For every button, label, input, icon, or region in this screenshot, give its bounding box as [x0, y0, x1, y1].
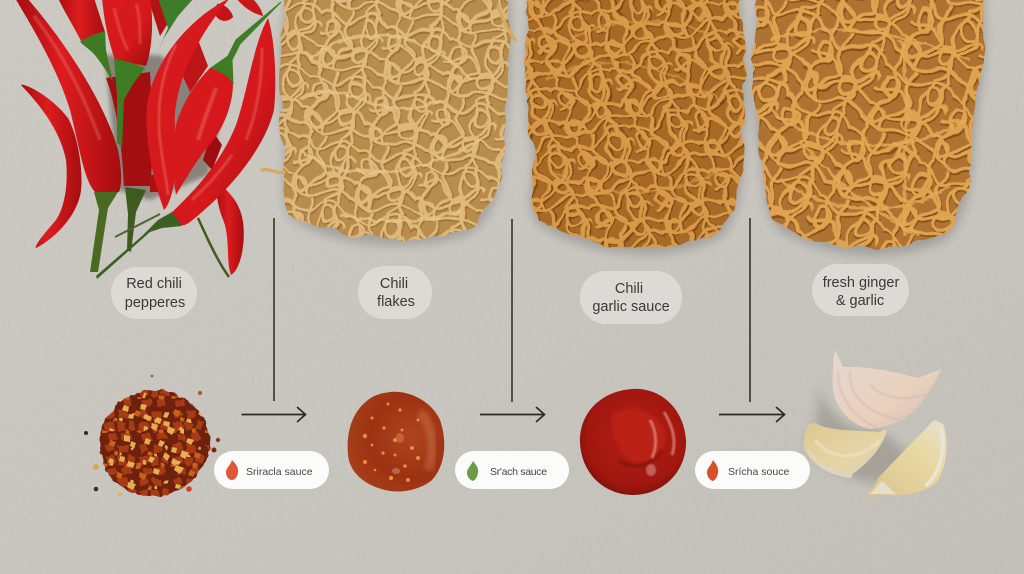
label: chili flakes	[358, 266, 432, 319]
white pill: sriracha sauce 3: Srícha souce	[728, 466, 789, 478]
pepper: small curved left chili	[21, 85, 82, 248]
pepper: green stem top	[156, 0, 194, 56]
scattered flakes	[84, 375, 220, 496]
noodle block 2: golden orange noodles	[525, 0, 747, 254]
garlic clove: lower left	[804, 423, 887, 476]
arrow 2	[480, 407, 544, 422]
pepper: upper left short chili	[58, 0, 113, 82]
pepper: large right chili with stems	[96, 18, 275, 279]
noodle block 3: amber fried noodles	[753, 0, 985, 255]
garlic cloves	[804, 350, 947, 498]
chili flakes pile	[84, 375, 220, 496]
arrow 1	[242, 407, 306, 422]
icon: green herb leaf	[467, 461, 478, 481]
icon: orange chili flame	[707, 460, 718, 481]
chili flake sauce dollop	[348, 392, 444, 492]
noodle block 1: pale noodles	[262, 0, 515, 245]
connector line 3	[749, 218, 751, 402]
label: chili flakes: Chili	[380, 276, 408, 292]
label: fresh ginger and garlic: & garlic	[836, 293, 884, 309]
white pill: sriracha sauce 1	[214, 451, 329, 489]
label: chili garlic sauce: garlic sauce	[592, 299, 670, 315]
pepper: tall center chili	[146, 0, 230, 210]
label: chili flakes: flakes	[377, 294, 415, 310]
icon group: red chili peppers	[15, 0, 281, 279]
label: red chili peppers	[111, 267, 197, 319]
label: chili garlic sauce: Chili	[615, 281, 643, 297]
label: fresh ginger and garlic	[812, 264, 909, 316]
pepper: long left chili	[15, 0, 121, 272]
pepper: top center chili	[102, 0, 152, 147]
garlic shadow	[805, 385, 925, 484]
pepper: small tips at the top	[148, 0, 263, 92]
soft shadow under peppers	[105, 55, 225, 200]
garlic clove: large pink	[833, 350, 941, 429]
label: fresh ginger and garlic: fresh ginger	[823, 275, 899, 291]
connector line 1	[273, 218, 275, 401]
garlic clove: lower right	[864, 420, 947, 498]
white pill: sriracha sauce 2: Sr'ach sauce	[490, 466, 547, 478]
connector line 2	[511, 219, 513, 402]
pepper: dark center chili with stem	[106, 72, 175, 252]
pepper: dark lower chili with stem	[198, 130, 244, 277]
icon: red chili flame	[226, 460, 238, 480]
pepper: middle chili with long stem	[173, 2, 281, 195]
label: red chili peppers: Red chili	[126, 276, 182, 292]
white pill: sriracha sauce 3	[695, 451, 810, 489]
white pill: sriracha sauce 1: Sriracla sauce	[246, 466, 313, 478]
white pill: sriracha sauce 2	[455, 451, 569, 489]
label: chili garlic sauce	[580, 271, 682, 324]
label: red chili peppers: pepperes	[125, 295, 185, 311]
chili garlic sauce dollop	[580, 389, 686, 495]
arrow 3	[719, 407, 784, 422]
